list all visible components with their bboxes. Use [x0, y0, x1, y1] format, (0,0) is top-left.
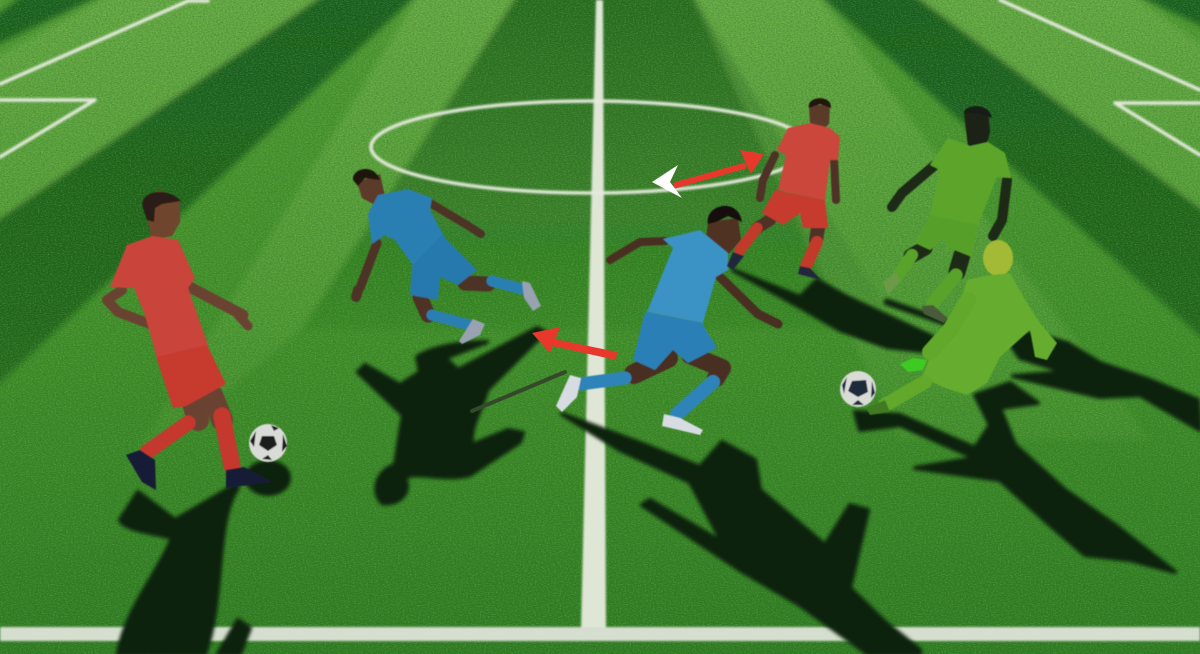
shadow: central blue player [562, 414, 920, 654]
arrow: run direction [532, 327, 617, 360]
shadow: left red player [118, 462, 289, 654]
head [964, 106, 992, 146]
shadow: running blue player [358, 328, 545, 503]
player: green goalkeeper sliding [840, 240, 1057, 415]
shadow: red midfielder [733, 270, 947, 352]
player: red defender with ball [107, 190, 287, 490]
football [249, 424, 287, 462]
player: red midfielder [727, 98, 840, 280]
head [706, 206, 742, 258]
head [142, 190, 181, 240]
shadow: green players [855, 333, 1200, 572]
football [840, 371, 876, 407]
arrow: two-way pass between players [652, 150, 764, 198]
head [983, 240, 1013, 276]
player: blue midfielder running [353, 169, 541, 344]
player: green defender [883, 106, 1011, 323]
head [353, 169, 385, 205]
player: blue attacker [556, 206, 778, 435]
head [809, 98, 831, 132]
grey shadow stripe [472, 372, 565, 411]
player shadows [118, 270, 1200, 654]
